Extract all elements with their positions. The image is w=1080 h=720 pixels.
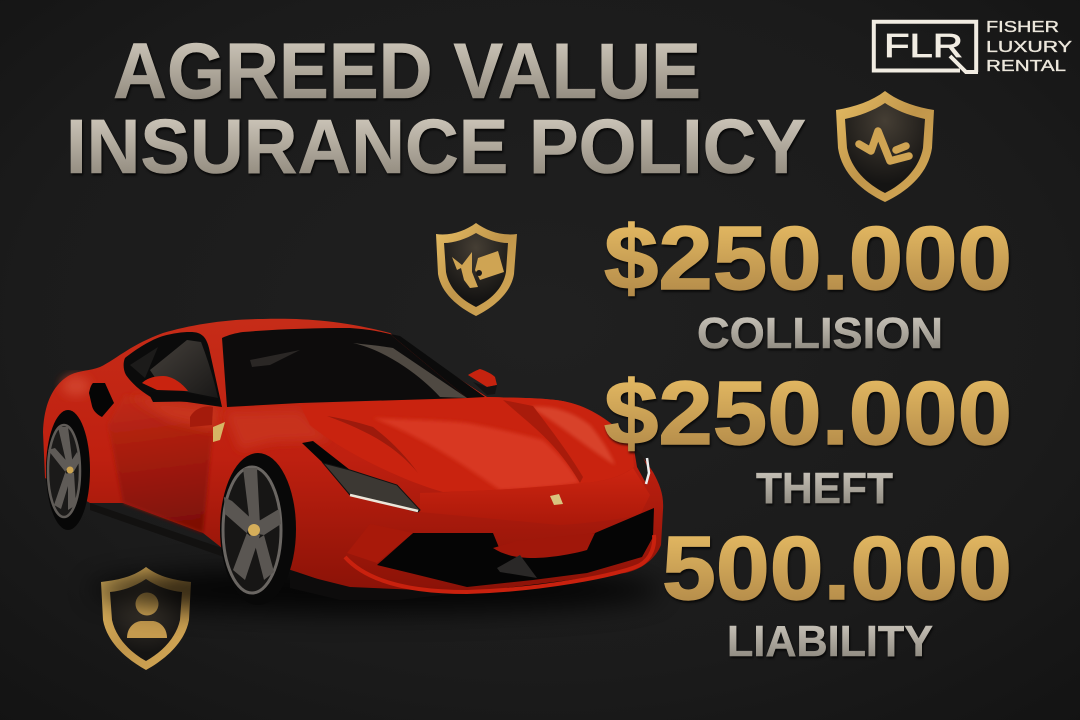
door panel (108, 395, 215, 533)
headlight (323, 463, 420, 512)
icon: shield with collision (436, 223, 517, 316)
right mirror (468, 369, 497, 387)
side window (124, 332, 222, 407)
amount: $250.000 theft (604, 364, 1012, 513)
door shadow (190, 406, 213, 427)
amount: $250.000 collision: COLLISION (697, 309, 943, 358)
left side vent by headlight (302, 441, 350, 470)
windshield (222, 328, 467, 407)
amount: 500.000 liability (662, 519, 1012, 666)
amount: $250.000 theft: THEFT (756, 464, 893, 513)
lower black sill (90, 503, 224, 557)
title: INSURANCE POLICY (66, 104, 806, 190)
hood badge (550, 494, 563, 505)
red sports car (43, 319, 663, 614)
side badge (213, 422, 225, 442)
icon: shield with pulse line (836, 91, 934, 202)
amount: 500.000 liability: 500.000 (662, 519, 1012, 619)
logo: Fisher Luxury Rental: FISHER (986, 19, 1059, 36)
front wheel (220, 453, 296, 605)
logo: Fisher Luxury Rental: FLR (884, 27, 963, 64)
rear wheel (46, 410, 90, 530)
logo: Fisher Luxury Rental: RENTAL (986, 58, 1066, 75)
amount: 500.000 liability: LIABILITY (727, 617, 933, 666)
front black underbody (290, 572, 467, 600)
title: AGREED VALUE (113, 26, 701, 115)
title (66, 26, 806, 190)
car body (43, 319, 663, 593)
side body highlight (130, 396, 220, 430)
hood (300, 397, 634, 492)
front fender highlight (225, 410, 330, 450)
amount: $250.000 theft: $250.000 (604, 364, 1012, 464)
icon: shield with person (101, 567, 191, 670)
right headlight (633, 443, 650, 485)
rear fender highlight (62, 376, 90, 396)
front nose shading (420, 468, 650, 525)
side mirror (142, 376, 188, 391)
front air intake (377, 508, 654, 587)
front lip (345, 535, 654, 592)
amount: $250.000 collision: $250.000 (604, 209, 1012, 309)
amount: $250.000 collision (604, 209, 1012, 358)
rear side vent (89, 383, 114, 417)
logo: Fisher Luxury Rental: LUXURY (986, 39, 1072, 56)
logo: Fisher Luxury Rental (874, 19, 1072, 75)
